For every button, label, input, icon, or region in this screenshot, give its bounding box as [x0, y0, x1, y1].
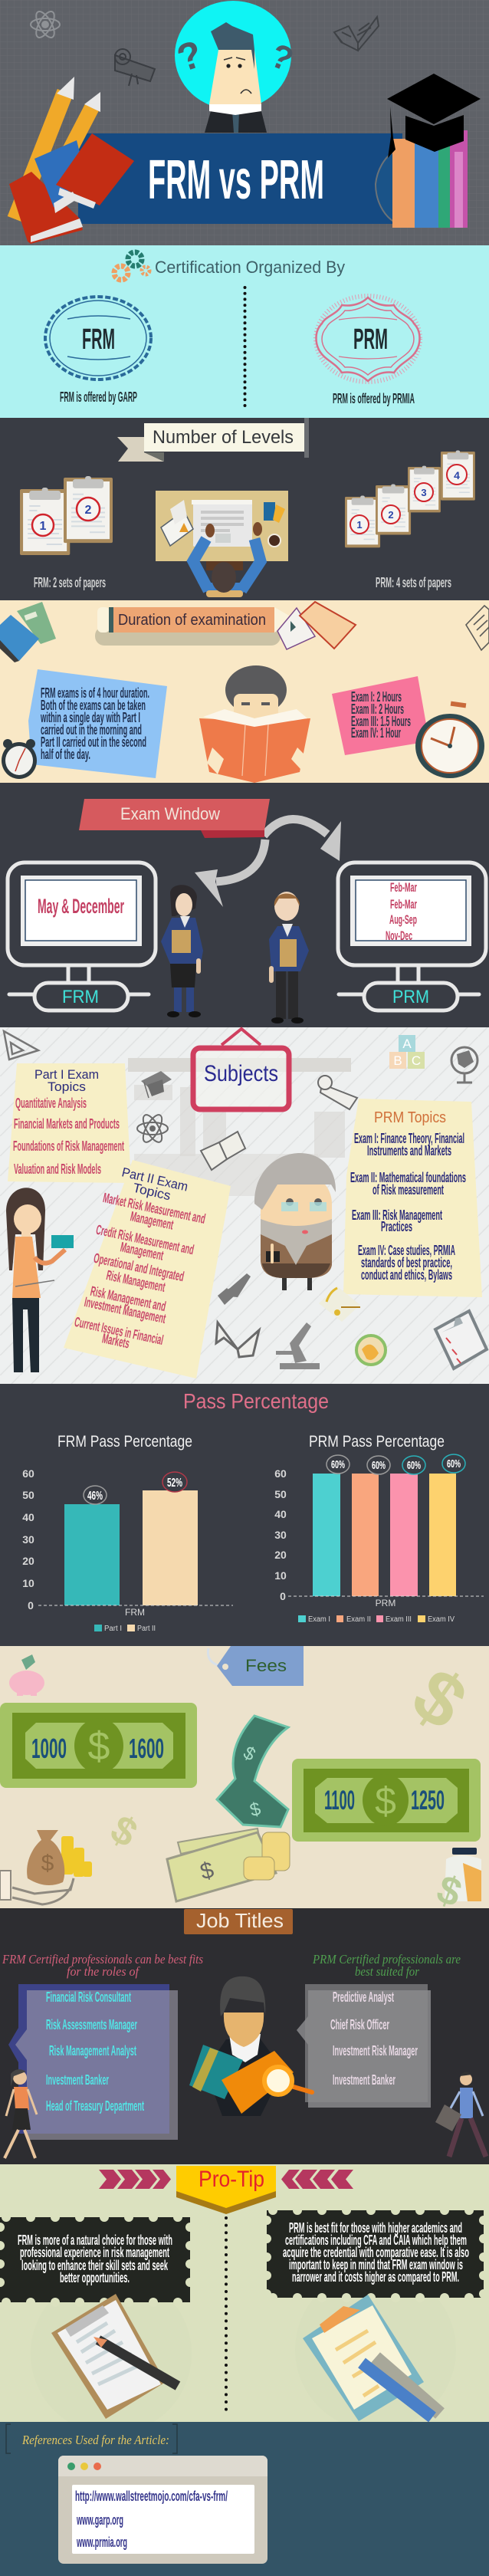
illustration: professor — [254, 1153, 336, 1290]
note: Part II topics — [64, 1160, 231, 1378]
monitor: PRM: Nov-Dec — [386, 928, 412, 943]
sign: Subjects — [193, 1029, 289, 1109]
note: Part II topics: Management — [129, 1208, 175, 1233]
note: PRM topics: PRM Topics — [374, 1109, 446, 1126]
panel: pass percentage — [0, 1384, 489, 1646]
chart: FRM pass percentage — [22, 1433, 233, 1633]
callout: PRM tip — [267, 2210, 484, 2298]
clipboard: PRM paper 2: 2 — [388, 509, 394, 521]
ribbon heading: Number of Levels — [153, 427, 294, 448]
panel: number of levels — [0, 418, 489, 600]
note: Part II topics: Topics — [132, 1181, 172, 1203]
note: Part II topics: Investment Management — [83, 1294, 167, 1326]
panel: pro-tip — [0, 2164, 489, 2434]
illustration: clipboard with pencil — [303, 2295, 440, 2421]
bracket heading: References Used for the Article: — [21, 2433, 169, 2447]
chart: PRM pass percentage — [274, 1433, 484, 1624]
bill: FRM fees: $ — [88, 1724, 110, 1769]
icon: atom — [137, 1112, 168, 1145]
chart: PRM pass percentage: 50 — [274, 1488, 287, 1500]
list box: PRM jobs: Predictive Analyst — [333, 1990, 394, 2005]
chart: PRM pass percentage: 10 — [274, 1569, 287, 1582]
arrow: to PRM — [264, 819, 341, 861]
backdrop circles — [31, 2269, 456, 2434]
note: Part II topics: Risk Management — [105, 1267, 166, 1295]
panel: certification organizer — [0, 245, 489, 418]
note: Part I topics — [8, 1063, 131, 1183]
chart: PRM pass percentage: PRM Pass Percentage — [309, 1433, 445, 1451]
note: FRM duration: carried out in the morning and — [41, 722, 142, 738]
icon: stopwatch — [415, 702, 484, 778]
illustration: walking man — [435, 2072, 486, 2157]
chart: FRM pass percentage: 20 — [22, 1555, 34, 1567]
illustration: books — [9, 133, 134, 244]
chart: PRM pass percentage: 30 — [274, 1529, 287, 1541]
list box: FRM jobs: Financial Risk Consultant — [46, 1990, 131, 2005]
note: Part II topics: Operational and Integrated — [92, 1250, 185, 1284]
icon: flying bill: $ — [248, 1799, 263, 1821]
note: Part II topics: Part II Exam — [120, 1165, 189, 1194]
chart: FRM pass percentage: FRM Pass Percentage — [57, 1433, 192, 1451]
badge: PRM — [316, 296, 420, 382]
icon: question mark right: ? — [265, 37, 298, 79]
note: Part II topics: Management — [119, 1239, 165, 1263]
icon: scroll — [318, 1076, 357, 1109]
icon: dollar sign large: $ — [398, 1651, 481, 1746]
icon: atom — [31, 9, 60, 40]
illustration: clipboard with pen — [51, 2294, 178, 2419]
chart: FRM pass percentage: 40 — [22, 1511, 34, 1523]
chart: PRM pass percentage: 40 — [274, 1508, 287, 1520]
note: FRM duration: Part II carried out in the second — [41, 734, 146, 750]
sign: Subjects: Subjects — [204, 1061, 278, 1086]
text: FRM intro: for the roles of — [67, 1964, 140, 1979]
clipboard: FRM paper 1 — [20, 488, 70, 555]
callout: FRM tip: FRM is more of a natural choice for those with — [18, 2233, 172, 2248]
tag heading — [176, 2166, 276, 2214]
bill: PRM fees: 1250 — [411, 1786, 445, 1815]
clipboard: PRM paper 3 — [408, 466, 441, 512]
chevrons left — [99, 2170, 171, 2189]
illustration: walking woman — [5, 2069, 37, 2158]
badge: PRM: PRM — [353, 324, 388, 356]
panel: exam window — [0, 783, 489, 1027]
chart: PRM pass percentage: Exam II — [346, 1615, 371, 1624]
note: Part I topics: Topics — [48, 1079, 86, 1094]
list box: FRM jobs — [8, 1984, 178, 2140]
icon: stacked books left — [0, 602, 56, 662]
note: Part II topics: Risk Management and — [89, 1283, 167, 1314]
clipboard: PRM paper 3: 3 — [421, 487, 427, 498]
panel: job titles — [0, 1908, 489, 2164]
chevrons right — [281, 2170, 353, 2189]
ribbon heading: Exam Window — [120, 804, 220, 823]
icon: paint brush — [218, 1273, 251, 1305]
chart: FRM pass percentage: 0 — [28, 1599, 34, 1612]
heading: Certification Organized By — [155, 258, 345, 277]
text: PRM intro: PRM Certified professionals are — [312, 1952, 461, 1967]
note: Part I topics: Valuation and Risk Models — [14, 1162, 101, 1177]
chart: PRM pass percentage: Exam III — [386, 1615, 412, 1624]
illustration: girl student — [161, 885, 203, 1017]
chart: FRM pass percentage: 10 — [22, 1577, 34, 1589]
note: PRM duration: Exam IV: 1 Hour — [351, 725, 401, 741]
icon: microscope — [276, 1322, 320, 1369]
bill: FRM fees — [0, 1703, 197, 1788]
icon: scroll — [115, 49, 155, 86]
clipboard: FRM paper 2 — [64, 476, 113, 543]
chart: FRM pass percentage: FRM — [125, 1607, 145, 1618]
browser window: http://www.wallstreetmojo.com/cfa-vs-frm/ — [75, 2489, 228, 2504]
icon: ruler triangle — [4, 1031, 38, 1060]
caption: FRM sets: FRM: 2 sets of papers — [34, 575, 106, 590]
illustration: confused man — [205, 22, 267, 133]
note: FRM duration: half of the day. — [41, 747, 90, 762]
chart: FRM pass percentage: 30 — [22, 1533, 34, 1546]
note: Part II topics: Credit Risk Measurement and — [95, 1222, 195, 1257]
icon: flying bill — [217, 1716, 288, 1827]
icon: coin jar: $ — [431, 1867, 468, 1916]
note: Part I topics: Quantitative Analysis — [15, 1096, 87, 1111]
icon: piggy bank — [9, 1654, 44, 1696]
browser window: www.garp.org — [76, 2512, 123, 2528]
note: PRM duration: Exam III: 1.5 Hours — [351, 714, 411, 729]
icon: alarm clock — [2, 739, 37, 779]
callout: FRM tip: professional experience in risk management — [20, 2245, 169, 2260]
monitor: PRM — [338, 863, 486, 1010]
note: FRM duration: FRM exams is of 4 hour duration. — [41, 685, 149, 701]
icon: banknotes and coins: $ — [198, 1857, 217, 1885]
illustration: person at desk — [156, 491, 288, 597]
heading: Pass Percentage — [183, 1389, 329, 1413]
icon: grad cap — [141, 1071, 172, 1098]
note: Part I topics: Financial Markets and Products — [14, 1116, 120, 1132]
icon: round badge — [356, 1336, 386, 1365]
divider dots — [225, 2218, 228, 2415]
badge: FRM: FRM — [82, 324, 115, 356]
illustration: teacher woman — [6, 1188, 74, 1372]
note: FRM duration: Both of the exams can be taken — [41, 698, 146, 713]
arrow: to FRM — [195, 840, 265, 907]
divider dots — [244, 288, 247, 408]
chart: PRM pass percentage: 0 — [280, 1590, 286, 1602]
icon: clipboard outline — [466, 606, 489, 650]
chart: PRM pass percentage: 60% — [447, 1457, 461, 1470]
icon: open book outline — [216, 1322, 259, 1357]
monitor: PRM: Feb-Mar — [390, 897, 417, 912]
icon: question mark left: ? — [172, 32, 208, 80]
note: PRM duration: Exam II: 2 Hours — [351, 702, 404, 717]
bill: PRM fees — [292, 1759, 481, 1842]
clipboard: PRM paper 2 — [376, 485, 411, 535]
chart: PRM pass percentage: 60% — [372, 1459, 386, 1472]
chart: FRM pass percentage: Part I — [104, 1625, 122, 1633]
note: Part II topics: Markets — [101, 1330, 131, 1352]
bill: FRM fees: 1000 — [31, 1733, 67, 1764]
list box: FRM jobs: Risk Assessments Manager — [46, 2017, 137, 2032]
list box: FRM jobs: Risk Management Analyst — [49, 2043, 136, 2058]
panel: references — [0, 2422, 489, 2576]
clipboard: PRM paper 4: 4 — [454, 469, 460, 481]
clipboard: FRM paper 1: 1 — [40, 520, 47, 533]
monitor: PRM: Aug-Sep — [389, 912, 417, 927]
ribbon heading — [79, 799, 270, 838]
note: FRM duration — [28, 669, 167, 778]
note: Part I topics: Foundations of Risk Management — [13, 1138, 124, 1154]
clipboard: PRM paper 4 — [441, 451, 475, 501]
text: FRM intro: FRM Certified professionals can be best fits — [2, 1952, 203, 1967]
chart: FRM pass percentage: 50 — [22, 1489, 34, 1501]
panel: duration of examination — [0, 600, 489, 783]
note: PRM duration: Exam I: 2 Hours — [351, 689, 402, 705]
chart: FRM pass percentage: 60 — [22, 1467, 34, 1480]
banner — [78, 133, 402, 224]
panel: hero — [0, 0, 489, 245]
clipboard: FRM paper 2: 2 — [85, 504, 92, 517]
icon: ABC blocks — [389, 1035, 425, 1069]
icon: money bag and hand — [0, 1830, 92, 1904]
chart: PRM pass percentage: PRM — [376, 1598, 395, 1608]
note: FRM duration: within a single day with Part I — [40, 710, 140, 725]
icon: checklist clipboard — [435, 1311, 487, 1368]
illustration: pencils — [15, 77, 100, 219]
sign heading: Job Titles — [196, 1909, 284, 1932]
illustration: boy student — [269, 892, 309, 1024]
list box: FRM jobs: Investment Banker — [46, 2072, 109, 2088]
text: PRM intro: best suited for — [355, 1964, 419, 1979]
chart: PRM pass percentage: 60% — [331, 1458, 345, 1471]
clipboard: PRM paper 1 — [345, 495, 380, 547]
monitor: PRM: Feb-Mar — [390, 880, 417, 895]
note: Part II topics: Current Issues in Financial — [73, 1314, 165, 1348]
text: PRM intro — [312, 1952, 461, 1979]
icon: open book — [201, 1132, 245, 1170]
icon: certificate — [319, 1286, 360, 1322]
callout: FRM tip — [0, 2217, 190, 2302]
note: Part I topics: Part I Exam — [34, 1067, 99, 1082]
tag heading: Pro-Tip — [199, 2167, 264, 2192]
tag heading: Fees — [245, 1656, 287, 1675]
bill: PRM fees: 1100 — [324, 1786, 355, 1815]
text: FRM intro — [2, 1952, 203, 1979]
icon: coin jar — [431, 1848, 481, 1916]
ribbon heading — [117, 418, 309, 462]
bracket heading — [6, 2424, 177, 2453]
monitor: FRM — [8, 863, 156, 1010]
chart: PRM pass percentage: Exam IV — [428, 1615, 455, 1624]
icon: cyan circle — [175, 1, 291, 110]
heading pencil: Duration of examination — [118, 612, 266, 629]
panel: subjects — [0, 1027, 489, 1384]
list box: PRM jobs — [297, 1984, 431, 2108]
icon: dollar sign small: $ — [103, 1807, 145, 1856]
bill: PRM fees: $ — [375, 1779, 396, 1822]
icon: open books — [277, 602, 356, 649]
monitor: FRM: May & December — [38, 895, 124, 918]
icon: flying bill: $ — [240, 1743, 259, 1766]
chart: FRM pass percentage: 52% — [167, 1477, 182, 1490]
icon: globe — [451, 1047, 478, 1083]
badge: FRM — [45, 297, 151, 380]
browser window — [58, 2456, 267, 2564]
icon: ABC blocks: C — [412, 1053, 421, 1068]
list box: PRM jobs: Chief Risk Officer — [330, 2017, 389, 2032]
icon: ABC blocks: B — [393, 1053, 402, 1068]
chart: PRM pass percentage: 60% — [407, 1459, 421, 1472]
tag heading — [208, 1646, 304, 1686]
note: Part II topics: Market Risk Measurement and — [102, 1190, 207, 1227]
note: PRM topics: Practices — [381, 1219, 412, 1234]
panel: fees — [0, 1646, 489, 1916]
chart: FRM pass percentage: 46% — [87, 1490, 103, 1503]
icon: gears — [114, 252, 149, 280]
chart: FRM pass percentage: Part II — [137, 1625, 156, 1633]
chart: PRM pass percentage: 60 — [274, 1467, 287, 1480]
chart: PRM pass percentage: 20 — [274, 1549, 287, 1561]
icon: money bag and hand: $ — [41, 1851, 54, 1876]
backdrop: building — [128, 1058, 351, 1196]
list box: PRM jobs: Investment Banker — [333, 2072, 395, 2088]
note: PRM duration — [332, 676, 429, 755]
monitor: FRM: FRM — [62, 987, 99, 1007]
title: FRM vs PRM — [148, 150, 324, 211]
clipboard: PRM paper 1: 1 — [356, 519, 363, 531]
heading pencil — [95, 607, 296, 646]
illustration: recruiter with briefcase — [189, 1976, 312, 2116]
chart: PRM pass percentage: Exam I — [308, 1615, 330, 1624]
illustration: stacked books and graduation cap — [376, 74, 481, 228]
browser window: www.prmia.org — [76, 2535, 127, 2550]
callout: FRM tip: looking to enhance their skill sets and seek — [21, 2258, 169, 2273]
icon: ABC blocks: A — [402, 1037, 412, 1051]
icon: banknotes and coins — [167, 1829, 290, 1901]
bill: FRM fees: 1600 — [129, 1733, 164, 1764]
panel: certification organizer: FRM is offered by GARP — [60, 389, 137, 405]
monitor: PRM: PRM — [392, 987, 429, 1007]
illustration: reader with book — [199, 665, 310, 783]
list box: FRM jobs: Head of Treasury Department — [46, 2098, 144, 2114]
icon: open book — [334, 17, 379, 51]
callout: FRM tip: better opportunities. — [60, 2270, 130, 2285]
note: PRM topics — [343, 1099, 482, 1297]
